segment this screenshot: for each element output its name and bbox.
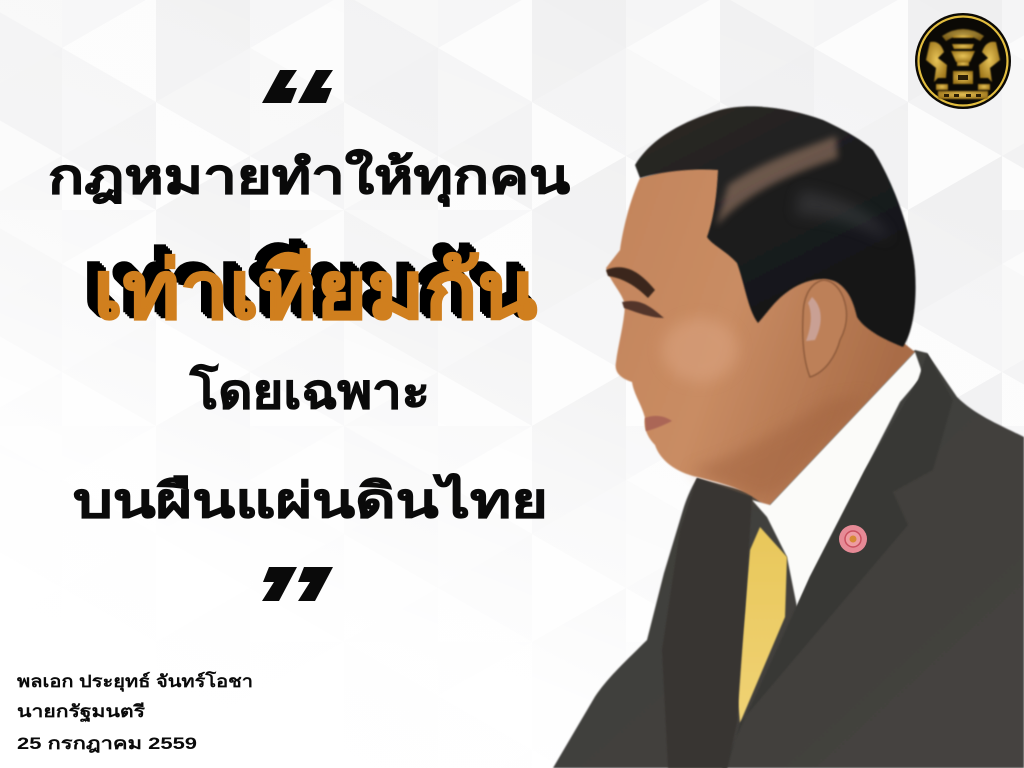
government seal bbox=[915, 13, 1011, 109]
attribution bbox=[17, 671, 253, 753]
portrait: highlight on cheek bbox=[662, 318, 738, 382]
portrait: lapel pin bbox=[839, 525, 867, 553]
headline line 2: emphasised orange word with black extrusion: เท่าเทียมกัน bbox=[87, 241, 531, 330]
headline line 2: emphasised orange word with black extrusion: เท่าเทียมกัน bbox=[85, 239, 529, 328]
portrait: shadow on neck bbox=[690, 395, 868, 498]
headline line 1: กฎหมายทำให้ทุกคน bbox=[48, 148, 570, 207]
portrait: jacket lapel bbox=[722, 353, 953, 768]
headline line 4: บนผืนแผ่นดินไทย bbox=[73, 472, 548, 528]
portrait: hearing aid bbox=[806, 297, 821, 341]
portrait of the prime minister bbox=[553, 106, 1024, 768]
portrait: ear bbox=[803, 280, 846, 377]
attribution: position: นายกรัฐมนตรี bbox=[17, 701, 146, 723]
portrait: hair bbox=[635, 106, 916, 347]
portrait: lips bbox=[645, 416, 672, 431]
opening quotation mark bbox=[262, 70, 333, 103]
headline line 2: emphasised orange word with black extrusion: เท่าเทียมกัน bbox=[83, 237, 527, 326]
attribution: date: 25 กรกฎาคม 2559 bbox=[17, 734, 197, 753]
portrait: suit jacket bbox=[553, 350, 1024, 768]
headline line 2: emphasised orange word with black extrusion: เท่าเทียมกัน bbox=[89, 243, 533, 332]
closing quotation mark bbox=[262, 567, 333, 601]
portrait: shirt collar bbox=[752, 352, 923, 607]
portrait: hair sheen bbox=[795, 190, 890, 240]
portrait: necktie bbox=[737, 527, 787, 723]
headline line 2: emphasised orange word with black extrusion: เท่าเทียมกัน bbox=[93, 246, 537, 335]
portrait: left jacket panel bbox=[662, 478, 752, 768]
headline line 3: โดยเฉพาะ bbox=[189, 363, 430, 419]
portrait: eyebrow and eye bbox=[606, 267, 664, 318]
attribution: name: พลเอก ประยุทธ์ จันทร์โอชา bbox=[17, 671, 253, 692]
portrait: face and neck bbox=[606, 160, 915, 508]
portrait: hair parting bbox=[716, 136, 838, 226]
